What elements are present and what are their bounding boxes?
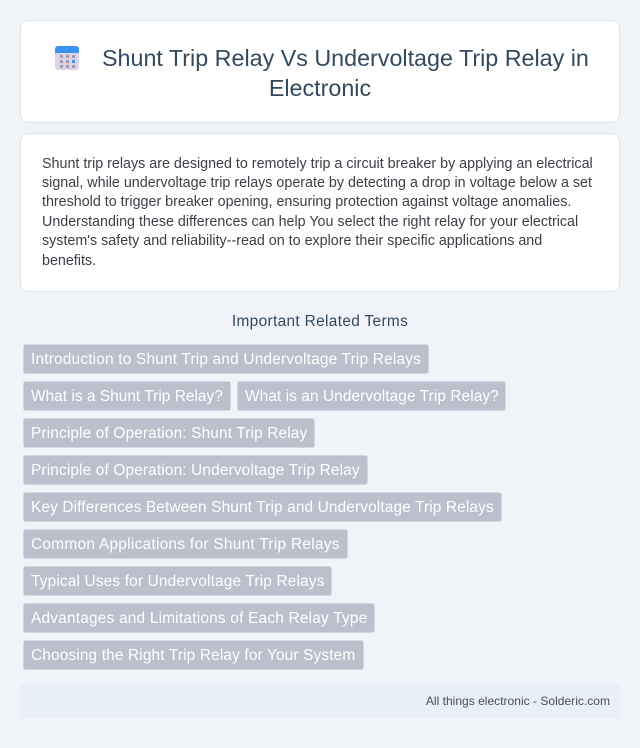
panel: intro text card xyxy=(20,133,620,292)
panel: term tags xyxy=(23,344,506,670)
tag xyxy=(23,566,332,596)
tag: Introduction to Shunt Trip and Undervoltage Trip Relays xyxy=(31,351,421,368)
intro text xyxy=(42,156,593,269)
intro text: Shunt trip relays are designed to remotely trip a circuit breaker by applying an electrical xyxy=(42,156,593,172)
intro text: Understanding these differences can help You select the right relay for your electrical xyxy=(42,214,578,230)
tag xyxy=(237,381,506,411)
tag xyxy=(23,381,231,411)
intro text: benefits. xyxy=(42,253,96,269)
tag: What is a Shunt Trip Relay? xyxy=(31,388,223,405)
tag xyxy=(23,529,348,559)
title xyxy=(102,45,589,101)
tag xyxy=(23,418,315,448)
tag: Choosing the Right Trip Relay for Your System xyxy=(31,647,355,664)
tag: Principle of Operation: Shunt Trip Relay xyxy=(31,425,307,442)
intro text: threshold to trigger breaker opening, ensuring protection against voltage anomalies. xyxy=(42,194,571,210)
tag: Principle of Operation: Undervoltage Trip Relay xyxy=(31,462,360,479)
tag: Key Differences Between Shunt Trip and Undervoltage Trip Relays xyxy=(31,499,494,516)
tag xyxy=(23,640,364,670)
panel: title card xyxy=(20,20,620,123)
icon: calendar xyxy=(55,46,79,70)
heading: related terms: Important Related Terms xyxy=(232,313,408,330)
title: Electronic xyxy=(269,75,371,101)
tag xyxy=(23,344,429,374)
intro text: signal, while undervoltage trip relays operate by detecting a drop in voltage below a set xyxy=(42,175,592,191)
footer xyxy=(20,684,620,718)
tag: Common Applications for Shunt Trip Relays xyxy=(31,536,340,553)
tag xyxy=(23,603,375,633)
title: Shunt Trip Relay Vs Undervoltage Trip Relay in xyxy=(102,45,589,71)
tag: Typical Uses for Undervoltage Trip Relays xyxy=(31,573,325,590)
tag: Advantages and Limitations of Each Relay Type xyxy=(31,610,367,627)
tag: What is an Undervoltage Trip Relay? xyxy=(245,388,499,405)
intro text: system's safety and reliability--read on to explore their specific applications and xyxy=(42,233,542,249)
footer: All things electronic - Solderic.com xyxy=(426,694,610,708)
tag xyxy=(23,455,368,485)
tag xyxy=(23,492,502,522)
